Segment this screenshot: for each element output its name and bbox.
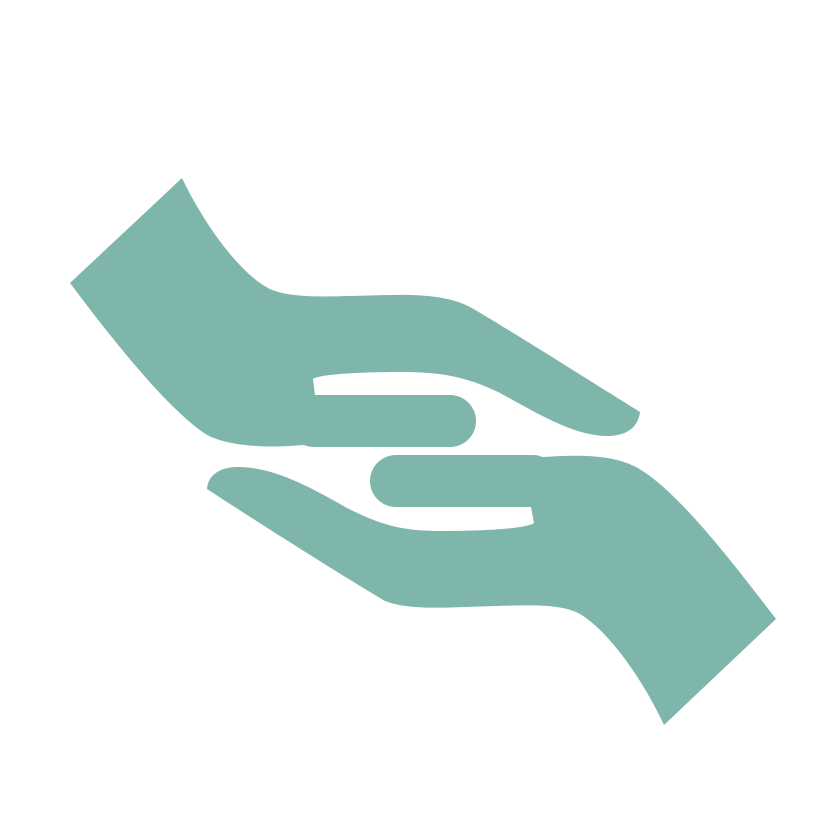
icon: upper hand bbox=[70, 178, 640, 447]
icon: lower hand bbox=[207, 455, 776, 725]
